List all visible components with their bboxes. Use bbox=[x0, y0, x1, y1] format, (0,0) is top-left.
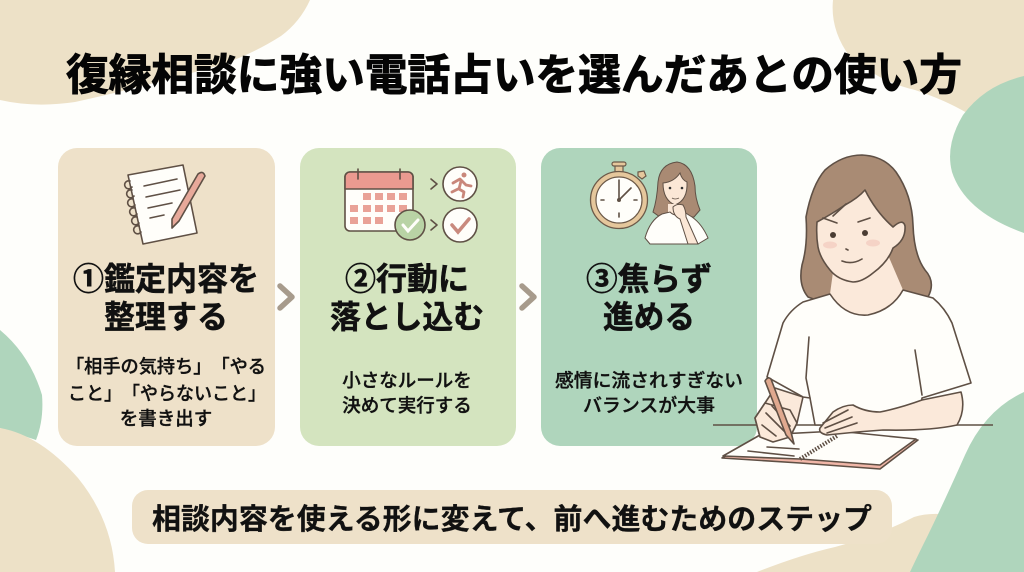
face bbox=[817, 190, 905, 282]
notebook bbox=[722, 432, 918, 469]
body: step 2: 小さなルールを bbox=[342, 370, 472, 391]
panel: step 2 bbox=[300, 148, 516, 446]
icon: notebook and pen bbox=[125, 165, 205, 244]
body: step 2 bbox=[342, 370, 472, 416]
panel: step 3: 進める bbox=[603, 299, 695, 335]
hair bbox=[801, 155, 931, 305]
right arm and hand bbox=[820, 392, 963, 435]
body: step 3: 感情に流されすぎない bbox=[555, 370, 743, 391]
body: step 1: こと」「やらないこと」 bbox=[68, 383, 266, 404]
banner: 相談内容を使える形に変えて、前へ進むためのステップ bbox=[152, 503, 872, 536]
arrow: step 2 to 3 bbox=[522, 286, 534, 308]
pen bbox=[765, 378, 794, 444]
left arm and hand bbox=[755, 388, 803, 442]
neck bbox=[830, 255, 903, 315]
body: step 1: を書き出す bbox=[120, 408, 212, 429]
body: step 3: バランスが大事 bbox=[583, 395, 715, 416]
body: step 1 bbox=[66, 356, 266, 429]
body: step 3 bbox=[555, 370, 743, 416]
shirt bbox=[767, 290, 971, 425]
banner bbox=[132, 490, 892, 544]
face details bbox=[823, 204, 880, 263]
desk line bbox=[713, 424, 993, 426]
title: 復縁相談に強い電話占いを選んだあとの使い方 bbox=[66, 52, 962, 100]
heading: step 3: ③焦らず bbox=[586, 261, 712, 297]
panel: step 1: 整理する bbox=[104, 299, 228, 335]
panel: step 3 bbox=[541, 148, 757, 446]
panel: step 1 bbox=[58, 148, 275, 446]
arrow: step 1 to 2 bbox=[280, 286, 292, 308]
body: step 1: 「相手の気持ち」「やる bbox=[66, 356, 266, 377]
heading: step 1: ①鑑定内容を bbox=[73, 261, 259, 297]
icon: stopwatch bbox=[590, 162, 648, 228]
left hand over notebook bbox=[755, 403, 797, 442]
body: step 2: 決めて実行する bbox=[342, 395, 472, 416]
icon: calendar with checks bbox=[345, 167, 477, 242]
illustration: woman writing bbox=[713, 155, 993, 469]
icon: thinking woman bbox=[645, 162, 708, 244]
heading: step 2: ②行動に bbox=[345, 261, 469, 297]
panel: step 2: 落とし込む bbox=[330, 299, 484, 335]
